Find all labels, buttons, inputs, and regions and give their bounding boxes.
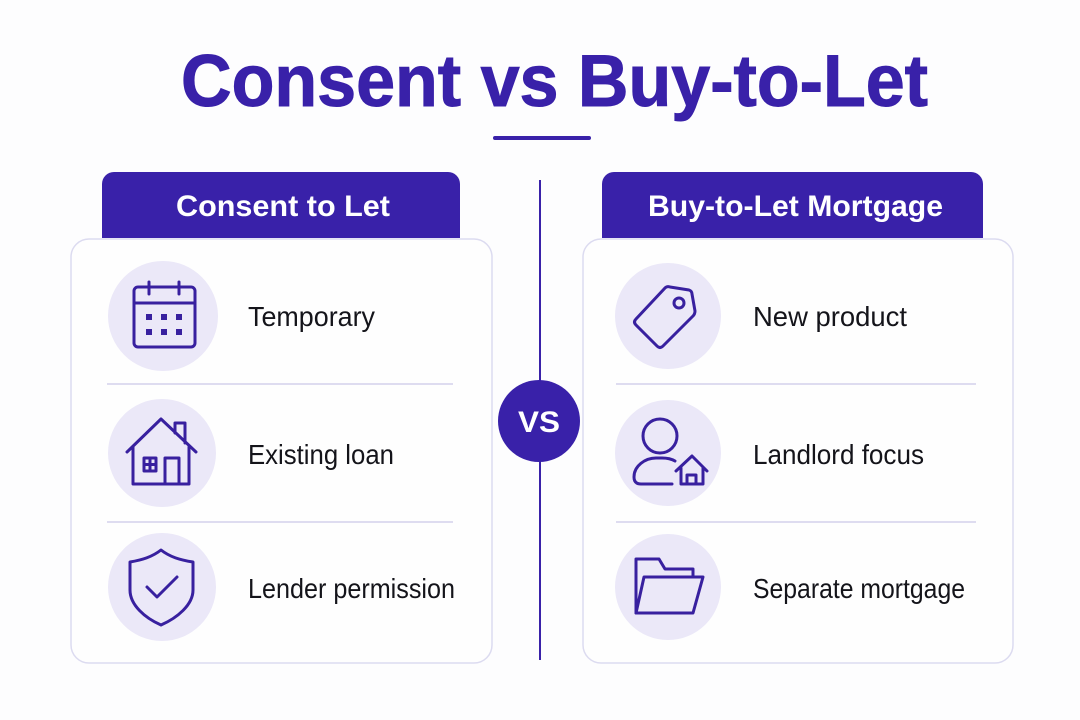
header tab: Consent to Let: Consent to Let [176, 190, 390, 223]
label: Existing loan: Existing loan [248, 439, 394, 470]
center divider line [539, 180, 541, 660]
label: Temporary: Temporary [248, 301, 375, 332]
card: Buy-to-Let Mortgage [583, 239, 1013, 663]
VS badge [498, 380, 580, 462]
label: New product: New product [753, 301, 907, 332]
icon: folder [615, 534, 721, 640]
title underline [493, 136, 591, 140]
header tab: Consent to Let [102, 172, 460, 238]
title: Consent vs Buy-to-Let [181, 41, 928, 122]
header tab: Buy-to-Let Mortgage [602, 172, 983, 238]
header tab: Buy-to-Let Mortgage: Buy-to-Let Mortgage [648, 190, 943, 223]
label: Lender permission: Lender permission [248, 573, 455, 604]
icon: shield with check [108, 533, 216, 641]
panel: Consent to Let [71, 172, 492, 663]
VS badge: VS [518, 406, 560, 439]
icon: house [108, 399, 216, 507]
panel: Buy-to-Let Mortgage [583, 172, 1013, 663]
label: Landlord focus: Landlord focus [753, 439, 924, 470]
icon: price tag [615, 263, 721, 369]
card: Consent to Let [71, 239, 492, 663]
label: Separate mortgage: Separate mortgage [753, 573, 965, 604]
icon: landlord person with house [615, 400, 721, 506]
icon: calendar [108, 261, 218, 371]
